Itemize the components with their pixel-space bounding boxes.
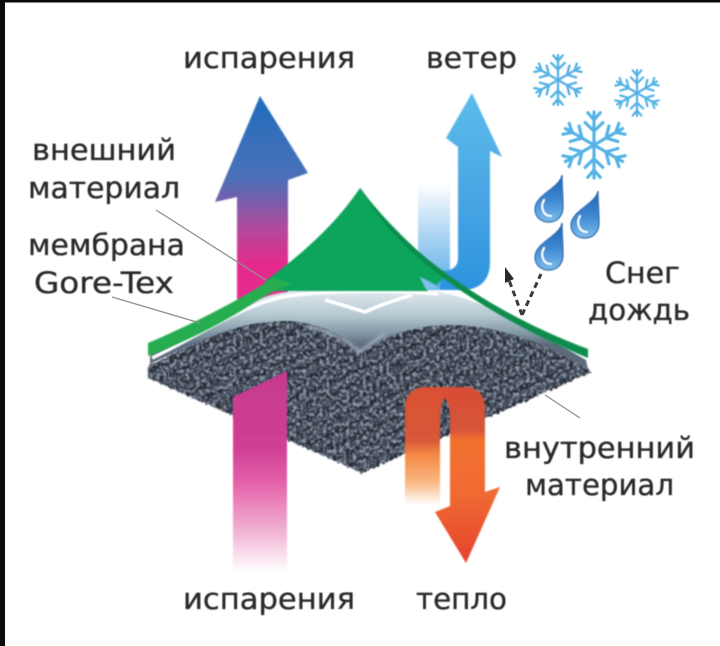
dashed arrow left xyxy=(509,280,522,315)
icon: rain drop 1 xyxy=(535,175,563,222)
label: rain: дождь xyxy=(588,293,690,327)
label: vapour top: испарения xyxy=(183,41,355,75)
green band right xyxy=(360,187,588,358)
dashed arrows: precipitation bouncing off xyxy=(509,274,541,315)
wind sliver below the cap xyxy=(420,277,440,289)
green cap xyxy=(258,188,445,291)
dashed arrow right xyxy=(522,274,541,315)
membrane fold highlight xyxy=(325,295,412,312)
membrane layer xyxy=(150,288,588,370)
arrow: heat xyxy=(405,387,500,563)
fleece dip highlight xyxy=(305,326,385,352)
dashed arrow head xyxy=(505,267,514,283)
arrow: vapour rising (upper) xyxy=(215,96,308,300)
label: inner material line 1: внутренний xyxy=(504,431,695,465)
icon: rain drop 3 xyxy=(535,223,563,270)
wind arrow fading leg xyxy=(418,183,450,290)
icon: rain drop 2 xyxy=(571,191,599,238)
label: outer material line 1: внешний xyxy=(32,133,176,167)
arrow: vapour passing through fleece (lower) xyxy=(233,371,287,572)
membrane white edge xyxy=(152,291,438,358)
inner fabric: dark fleece xyxy=(148,318,592,473)
icon: snowflake 1 xyxy=(533,55,583,105)
label: wind: ветер xyxy=(426,41,517,75)
label: membrane line 2: Gore-Tex xyxy=(34,266,174,300)
heat arrow head and shaft xyxy=(435,387,500,563)
arrow: wind xyxy=(418,93,502,290)
icon: snowflake 3 xyxy=(561,112,627,178)
label: membrane line 1: мембрана xyxy=(28,228,185,262)
leader line: inner material xyxy=(545,395,580,418)
label: inner material line 2: материал xyxy=(525,468,674,502)
label: outer material line 2: материал xyxy=(28,171,180,205)
leader line: outer material xyxy=(156,210,272,284)
label: snow: Снег xyxy=(605,256,680,290)
icon: snowflake 2 xyxy=(614,70,660,116)
fabric layers xyxy=(148,288,592,473)
wind arrow head and shaft xyxy=(440,93,502,290)
label: vapour bottom: испарения xyxy=(183,582,355,616)
outer material: green layer xyxy=(148,187,588,358)
green band left xyxy=(148,278,292,356)
heat arrow fading leg xyxy=(405,387,445,505)
leader line: membrane xyxy=(112,297,200,323)
label: heat: тепло xyxy=(416,582,507,616)
